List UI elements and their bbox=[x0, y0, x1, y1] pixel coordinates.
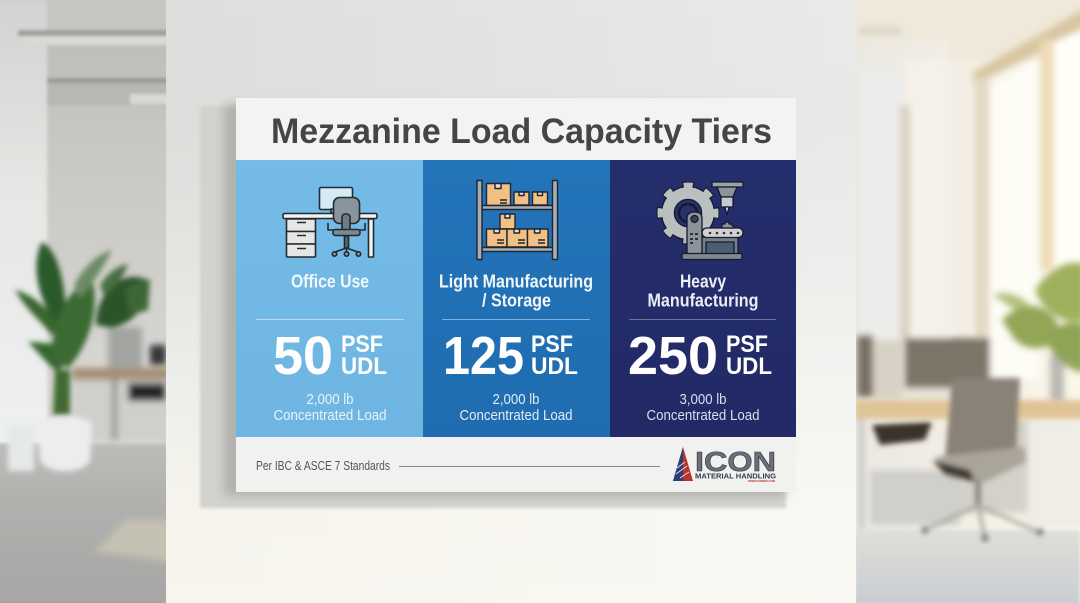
concentrated load: Concentrated Load bbox=[646, 407, 760, 424]
footer note: Per IBC & ASCE 7 Standards bbox=[256, 459, 390, 473]
value: 125 PSF UDL bbox=[443, 326, 578, 386]
tier name: Office Use bbox=[291, 272, 369, 292]
sign board bbox=[236, 98, 796, 492]
value: 250 PSF UDL: UDL bbox=[726, 353, 772, 380]
value: 250 PSF UDL bbox=[628, 326, 772, 386]
tier name: / Storage bbox=[482, 290, 551, 310]
icon: office desk and chair bbox=[283, 188, 377, 257]
tier name: Light Manufacturing bbox=[439, 272, 593, 292]
concentrated load: Concentrated Load bbox=[460, 407, 572, 424]
concentrated load bbox=[274, 391, 386, 424]
header band bbox=[236, 98, 796, 161]
icon: gear and machine bbox=[661, 182, 743, 260]
value: 250 PSF UDL: PSF bbox=[726, 331, 768, 358]
value: 125 PSF UDL: UDL bbox=[531, 353, 578, 380]
panel: office use bbox=[236, 160, 423, 437]
wall bbox=[166, 0, 856, 603]
logo: ICON Material Handling bbox=[673, 446, 777, 483]
concentrated load: 2,000 lb bbox=[492, 391, 540, 408]
concentrated load: Concentrated Load bbox=[274, 407, 386, 424]
tier name bbox=[439, 272, 593, 310]
panel: light manufacturing bbox=[423, 160, 610, 437]
background: blurred office left bbox=[0, 0, 175, 603]
title: Mezzanine Load Capacity Tiers bbox=[271, 112, 772, 151]
tier name bbox=[648, 272, 758, 310]
value: 50 PSF UDL bbox=[273, 326, 387, 386]
value: 125 PSF UDL: 125 bbox=[443, 326, 524, 386]
sign shadow bbox=[200, 104, 786, 508]
tier name: Manufacturing bbox=[648, 290, 758, 310]
concentrated load bbox=[460, 391, 572, 424]
logo: ICON Material Handling: MATERIAL HANDLING bbox=[695, 474, 777, 480]
tier name: Heavy bbox=[680, 272, 726, 292]
panel: heavy manufacturing bbox=[610, 160, 796, 437]
value: 50 PSF UDL: PSF bbox=[341, 331, 383, 358]
background: blurred office right bbox=[850, 0, 1080, 603]
concentrated load bbox=[646, 391, 760, 424]
plant leaves bbox=[53, 370, 70, 415]
value: 50 PSF UDL: 50 bbox=[273, 326, 333, 386]
logo: ICON Material Handling: ICON bbox=[695, 446, 776, 477]
concentrated load: 3,000 lb bbox=[680, 391, 726, 408]
right plant bbox=[1050, 355, 1064, 403]
value: 250 PSF UDL: 250 bbox=[628, 326, 718, 386]
concentrated load: 2,000 lb bbox=[306, 391, 354, 408]
value: 50 PSF UDL: UDL bbox=[341, 353, 387, 380]
footer band bbox=[236, 437, 796, 492]
icon: storage shelves with boxes bbox=[477, 180, 558, 260]
value: 125 PSF UDL: PSF bbox=[531, 331, 573, 358]
logo: ICON Material Handling: WWW.ICONMH.COM bbox=[748, 479, 775, 483]
